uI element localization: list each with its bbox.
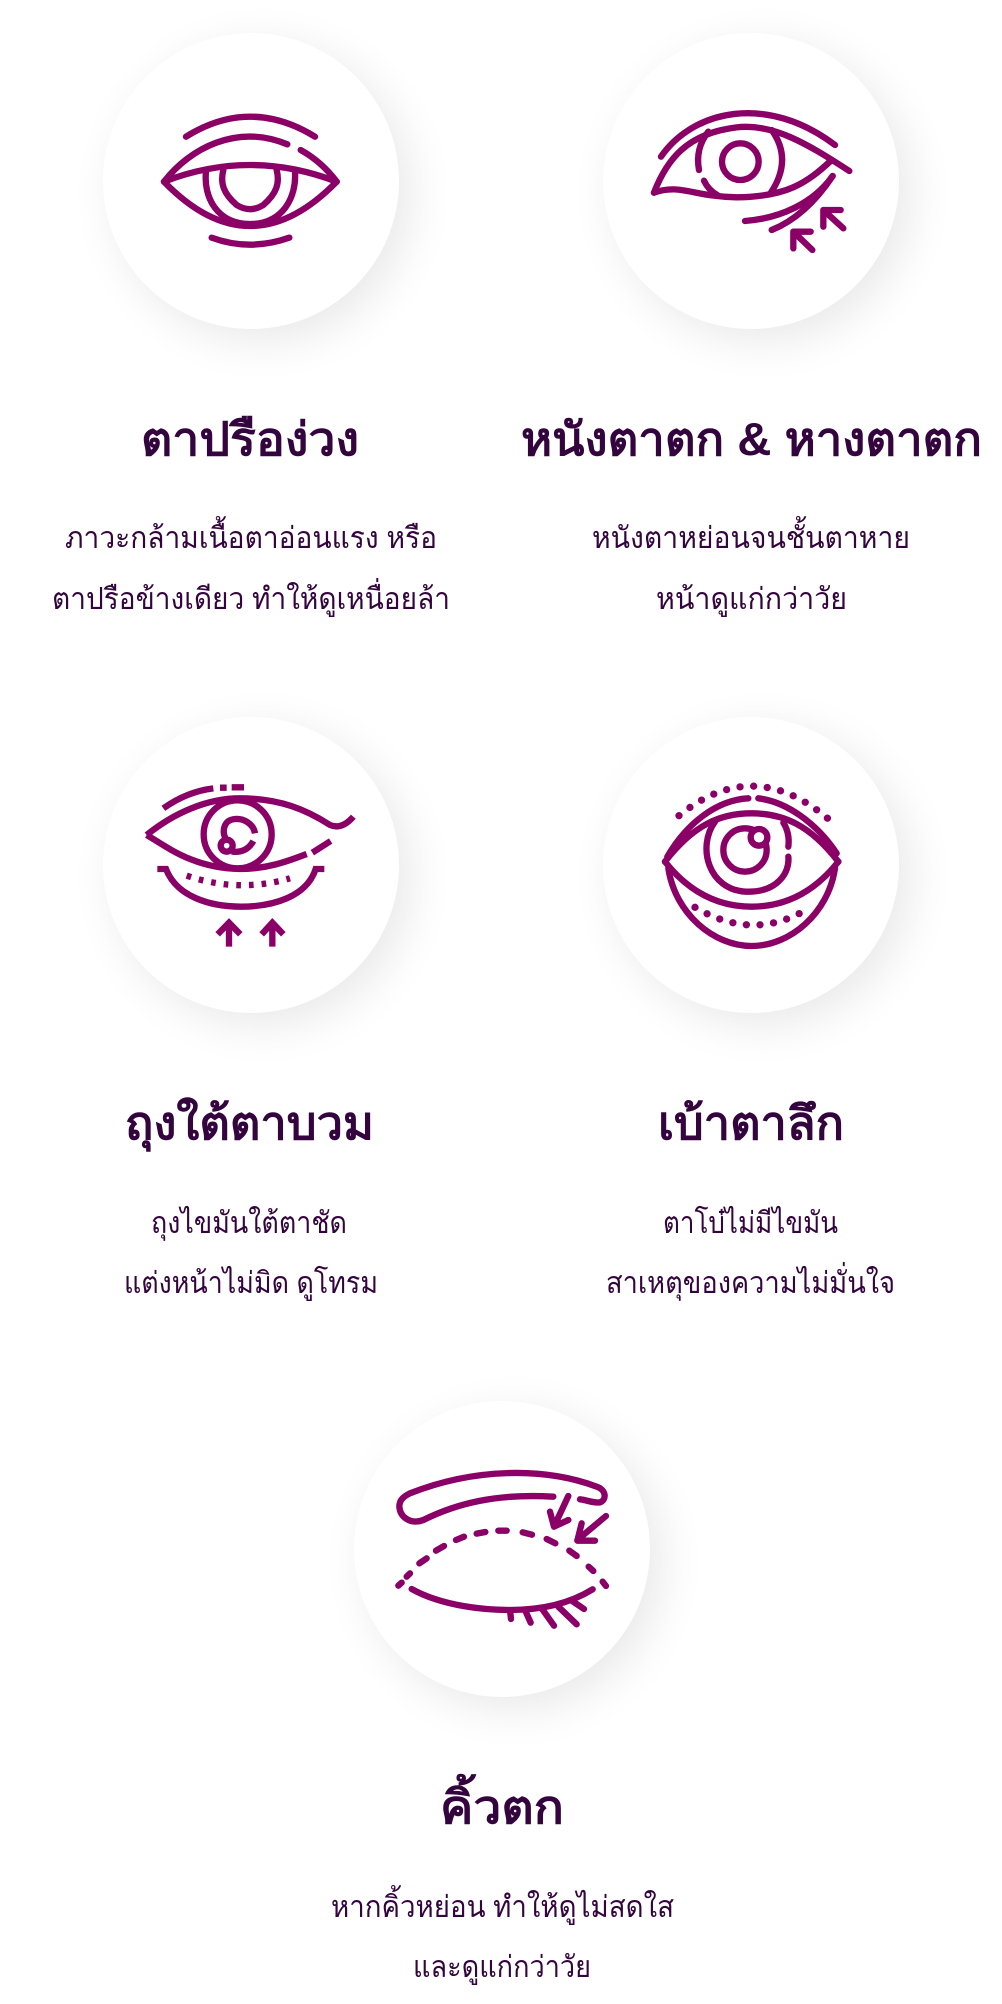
heading: ถุงใต้ตาบวม xyxy=(125,1096,374,1152)
icon: sagging eye xyxy=(654,113,849,250)
icon circle: drooping eyebrow xyxy=(354,1401,650,1697)
icon circle: sagging eyelid xyxy=(603,33,899,329)
icon: droopy eye xyxy=(164,117,337,245)
description xyxy=(124,1205,378,1301)
heading: ตาปรือง่วง xyxy=(141,413,359,465)
icon: eye with under-eye bag xyxy=(147,787,353,947)
description xyxy=(592,516,910,617)
heading: เบ้าตาลึก xyxy=(658,1097,844,1149)
panel: drooping eyebrow xyxy=(331,1426,674,1985)
description: หนังตาหย่อนจนชั้นตาหาย xyxy=(592,516,910,555)
description xyxy=(52,516,450,617)
icon circle: sunken socket xyxy=(603,717,899,1013)
icon: drooping eyebrow xyxy=(398,1473,606,1626)
description: ถุงไขมันใต้ตาชัด xyxy=(151,1205,347,1242)
description: ตาโบ๋ไม่มีไขมัน xyxy=(663,1205,838,1240)
icon circle: under-eye bags xyxy=(103,717,399,1013)
description: หน้าดูแก่กว่าวัย xyxy=(656,583,847,617)
panel: droopy eyelid xyxy=(52,58,450,617)
description: ภาวะกล้ามเนื้อตาอ่อนแรง หรือ xyxy=(65,516,437,555)
description: และดูแก่กว่าวัย xyxy=(413,1951,591,1985)
panel: sunken eye socket xyxy=(606,742,916,1302)
heading: หนังตาตก & หางตาตก xyxy=(521,413,982,465)
description xyxy=(606,1205,895,1302)
heading: คิ้วตก xyxy=(440,1773,564,1833)
panel: sagging eyelid and eye corner xyxy=(521,58,982,617)
icon: sunken eye xyxy=(665,786,838,946)
description: แต่งหน้าไม่มิด ดูโทรม xyxy=(124,1265,378,1301)
panel: under-eye bags xyxy=(124,742,416,1301)
description: หากคิ้วหย่อน ทำให้ดูไม่สดใส xyxy=(331,1885,674,1925)
description: ตาปรือข้างเดียว ทำให้ดูเหนื่อยล้า xyxy=(52,578,450,617)
description xyxy=(331,1885,674,1985)
description: สาเหตุของความไม่มั่นใจ xyxy=(606,1262,895,1302)
icon circle: droopy eyelid xyxy=(103,33,399,329)
